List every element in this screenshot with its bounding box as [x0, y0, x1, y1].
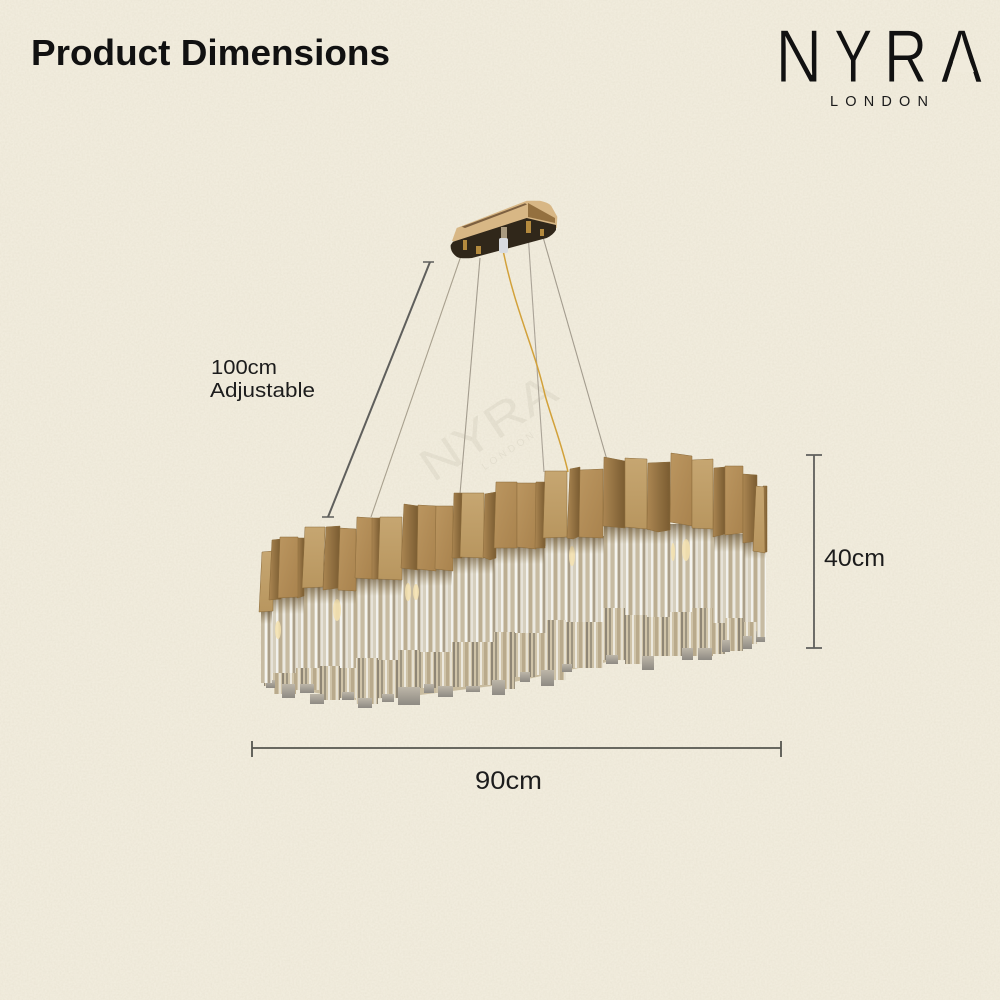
watermark: LONDON	[480, 430, 536, 473]
logo: NYRA London: N	[776, 14, 822, 98]
logo: NYRA London: Y	[834, 15, 873, 99]
warm glow of lamps	[275, 539, 690, 639]
crystal rods: grey end caps	[266, 631, 765, 708]
shadow below gold panels	[261, 524, 766, 624]
label: 100cm Adjustable	[210, 357, 315, 402]
logo: NYRA London: A	[941, 14, 982, 98]
watermark: NYRA	[410, 363, 566, 491]
logo: NYRA London: LONDON	[830, 94, 928, 110]
label: 100cm Adjustable: Adjustable	[210, 380, 315, 402]
watermark	[410, 363, 572, 500]
gold metal panels	[259, 453, 767, 612]
suspension cords	[371, 233, 607, 517]
dimension line: 40cm height	[806, 455, 822, 648]
label: 90cm: 90cm	[475, 767, 542, 795]
label: 40cm: 40cm	[824, 545, 885, 572]
ceiling canopy	[451, 201, 557, 258]
dimension line: 90cm width	[252, 741, 781, 757]
crystal rods: upper tier	[261, 524, 766, 683]
crystal rods: lower tier	[264, 600, 766, 704]
chandelier	[259, 453, 767, 708]
logo: NYRA London: R	[884, 16, 927, 99]
logo: NYRA London	[776, 14, 982, 110]
title: Product Dimensions	[31, 32, 390, 73]
label: 100cm Adjustable: 100cm	[211, 357, 277, 379]
dimension line: 100cm adjustable	[322, 262, 434, 517]
crystal backing	[262, 525, 765, 700]
